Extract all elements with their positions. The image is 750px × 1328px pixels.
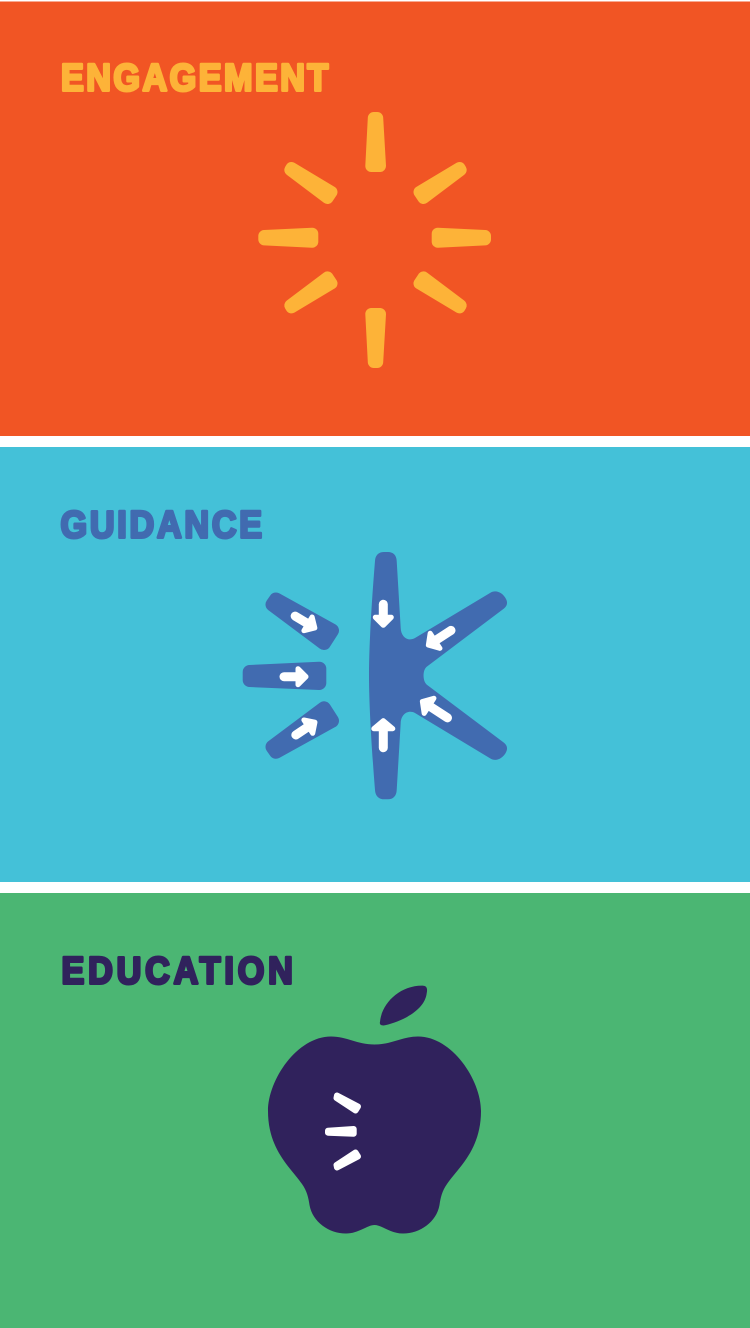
icon: joined ray shape: [369, 552, 507, 799]
heading: education: EDUCATION: [62, 949, 293, 992]
icon: apple leaf: [380, 986, 427, 1025]
heading: engagement: ENGAGEMENT: [61, 56, 328, 99]
icon: white dashes on apple: [328, 1096, 358, 1168]
panel: education: [0, 893, 750, 1328]
icon: apple body: [268, 1036, 481, 1234]
icon: white inward arrows: [284, 604, 456, 748]
panel: guidance: [0, 447, 750, 882]
icon: spark of eight rays: [264, 118, 485, 362]
heading: guidance: GUIDANCE: [60, 503, 262, 546]
panel: engagement: [0, 2, 750, 436]
icon: separated rays: [250, 600, 332, 752]
